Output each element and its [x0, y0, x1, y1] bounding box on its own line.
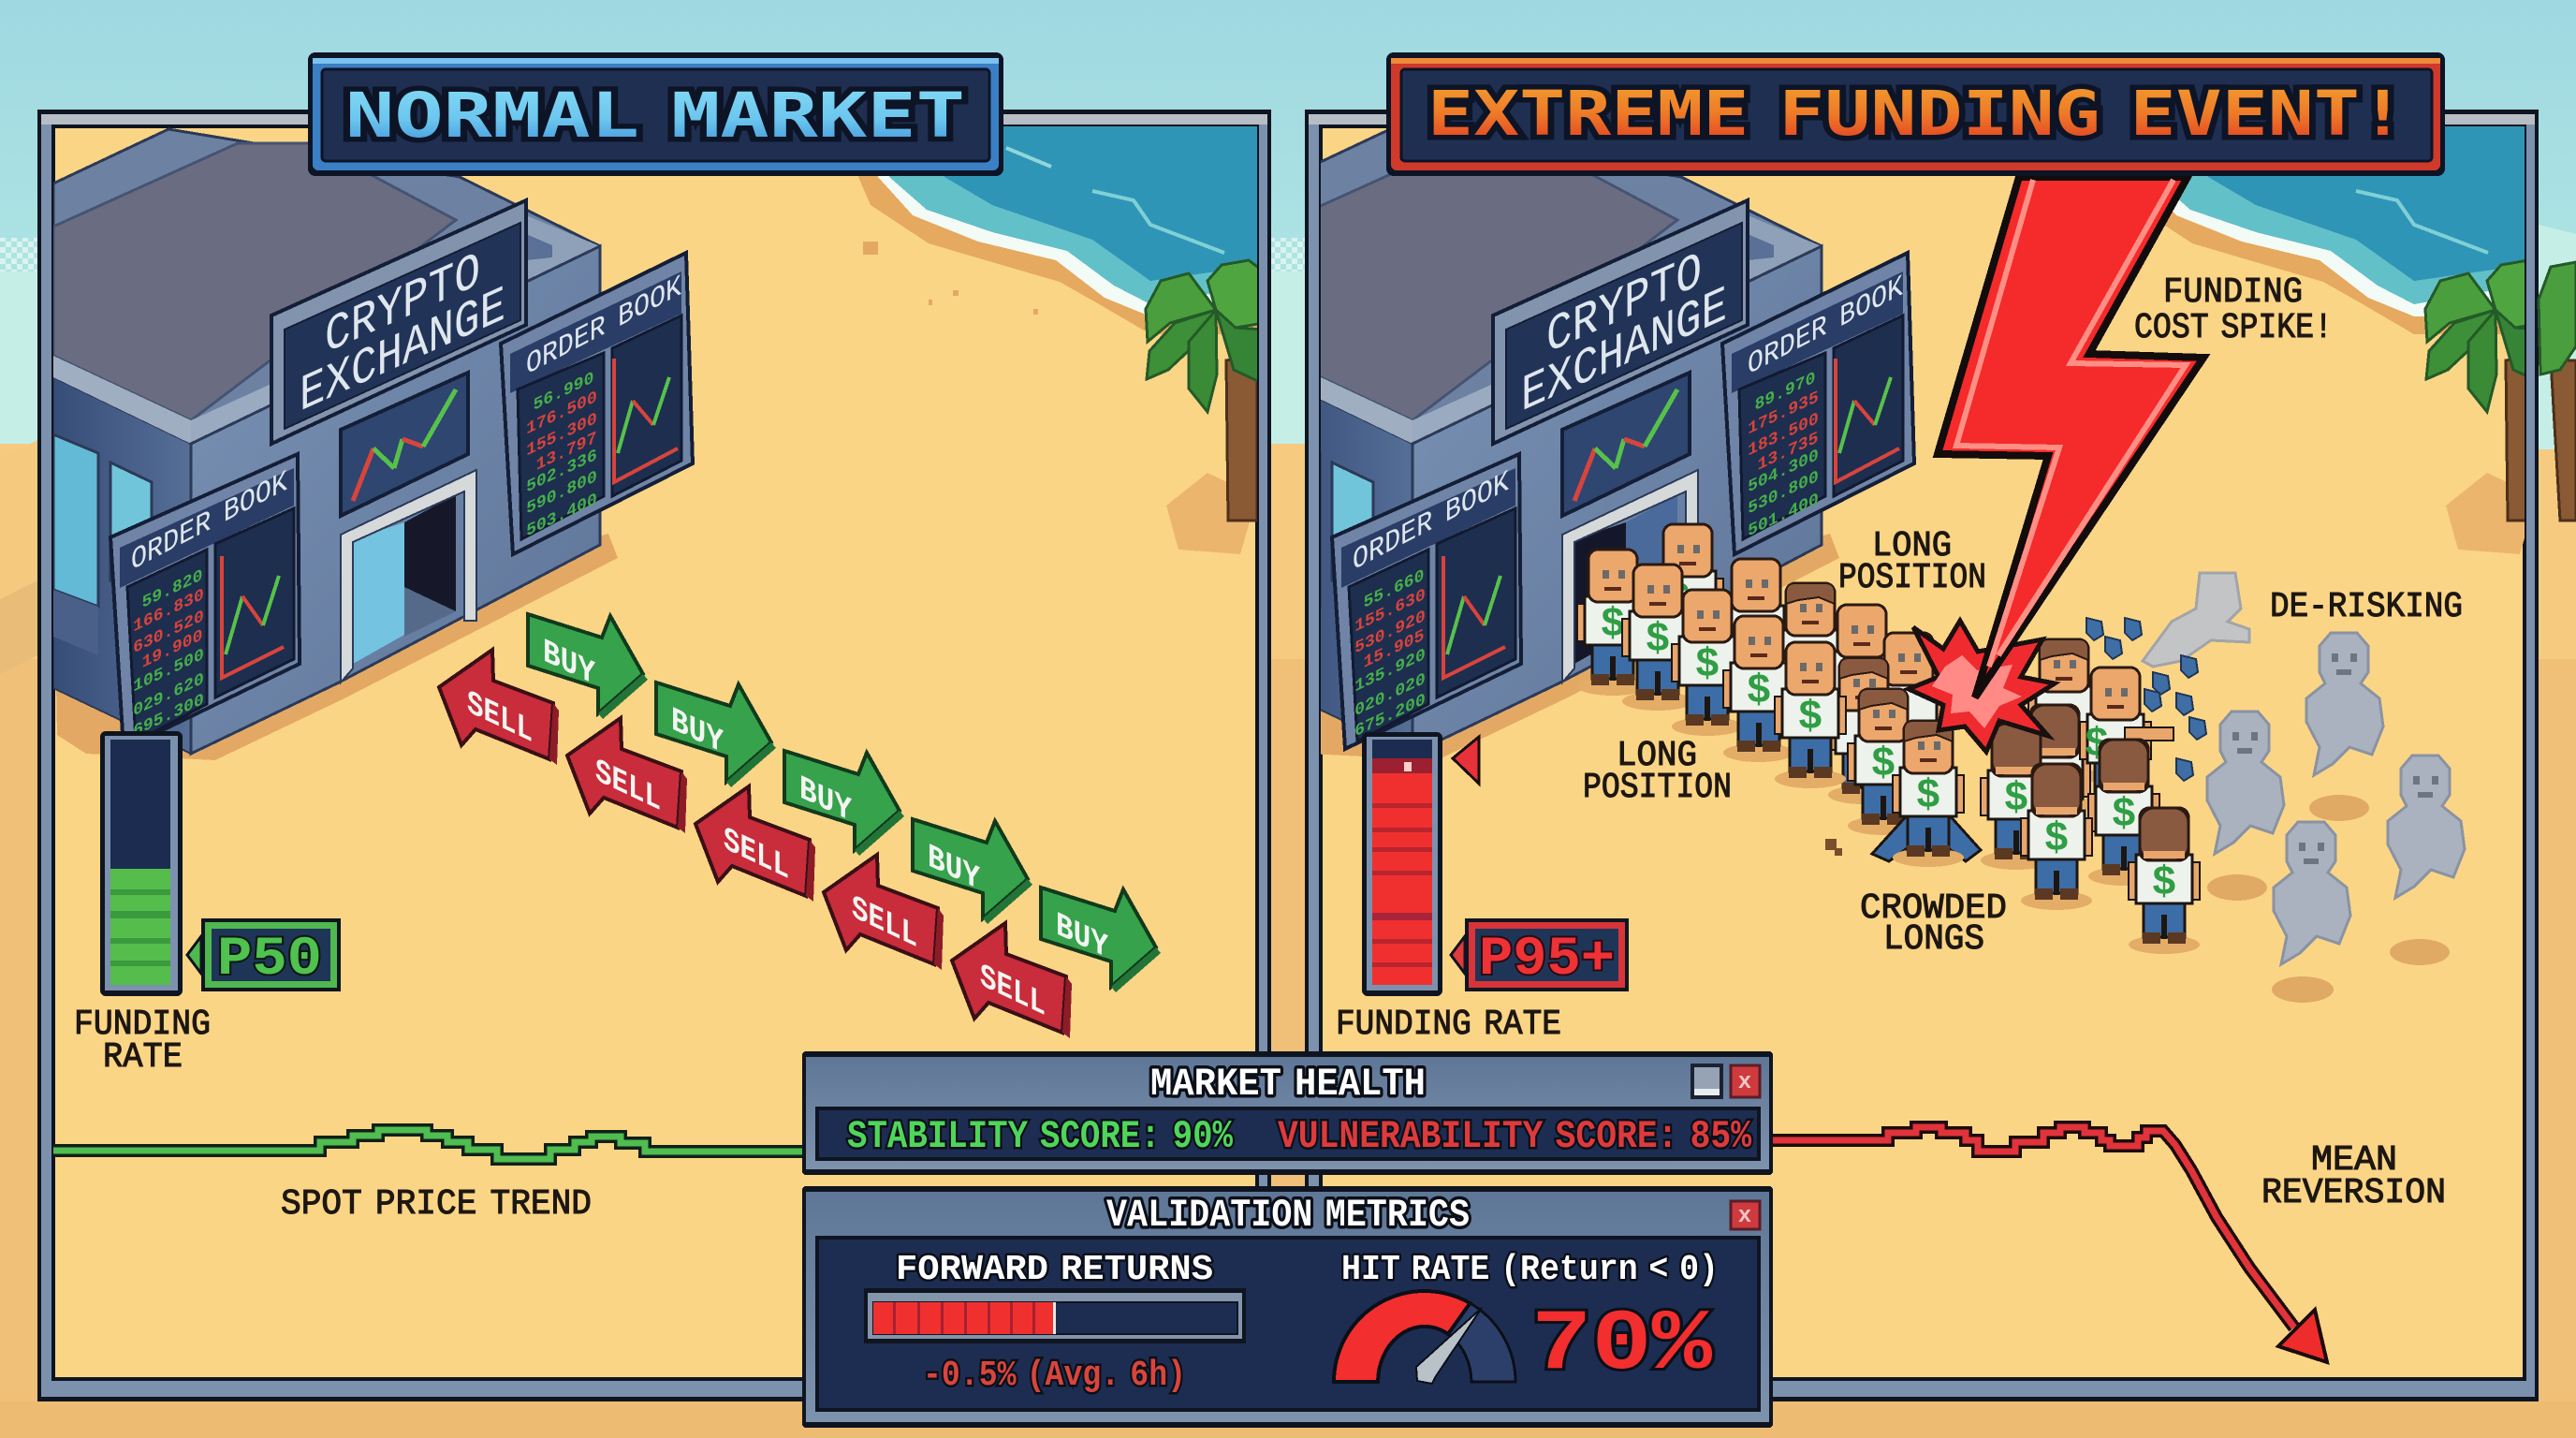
lightning bolt [1938, 177, 2203, 697]
sprawling figure with spread legs [1872, 721, 1981, 867]
crypto exchange building: 166.830 [133, 584, 204, 637]
crypto exchange building: 15.905 [1364, 625, 1424, 673]
crypto exchange building: 176.500 [526, 387, 597, 439]
hit rate heading: HIT RATE (Return < 0) [1341, 1250, 1719, 1290]
crowd of long positions: $ [1747, 668, 1771, 715]
label: long position top: LONG [1872, 526, 1952, 566]
label: crowded longs: CROWDED [1860, 888, 2007, 929]
tag: P95+ [1451, 918, 1629, 991]
close button [1731, 1201, 1760, 1229]
crypto exchange building: 630.520 [133, 606, 204, 658]
crypto exchange building: 89.970 [1755, 368, 1815, 416]
crypto exchange building: 155.630 [1354, 584, 1426, 637]
crypto exchange building: 504.300 [1748, 445, 1819, 497]
label: mean reversion: MEAN [2311, 1140, 2397, 1181]
crowd of long positions: $ [1695, 642, 1720, 689]
label: funding cost spike: FUNDING [2163, 272, 2303, 313]
crypto exchange building: EXCHANGE [300, 277, 505, 427]
title: extreme funding event: EXTREME FUNDING EVENT! [1427, 78, 2406, 150]
forward returns bar [864, 1288, 1246, 1343]
funding rate gauge P50 [100, 731, 183, 996]
close button [1731, 1065, 1760, 1097]
title: normal market [308, 52, 1003, 176]
crowd of long positions: $ [1666, 577, 1690, 624]
crowd of long positions [1577, 524, 2200, 954]
minimize button [1692, 1065, 1721, 1097]
crypto exchange building: 530.800 [1748, 466, 1819, 519]
tag: P50: P50 [217, 930, 322, 990]
buy and sell order arrows: BUY [671, 700, 724, 764]
label: spot price trend: SPOT PRICE TREND [281, 1184, 592, 1225]
funding rate gauge P95+ [1362, 732, 1442, 996]
crypto exchange building: 503.400 [526, 489, 597, 541]
flying debris [1825, 618, 2206, 856]
crypto exchange building: 175.935 [1748, 387, 1819, 439]
label: crowded longs: LONGS [1883, 919, 1984, 960]
crypto exchange building: 55.660 [1364, 565, 1424, 613]
label: funding rate: FUNDING RATE [1336, 1005, 1561, 1045]
label: mean reversion: REVERSION [2261, 1173, 2446, 1213]
label: long position lower: POSITION [1583, 768, 1732, 808]
palm tree [1146, 260, 1264, 554]
forward returns heading: FORWARD RETURNS [896, 1250, 1213, 1290]
crypto exchange building: 502.336 [526, 445, 597, 497]
crowd of long positions: $ [1601, 602, 1625, 649]
buy and sell order arrows: BUY [928, 837, 980, 901]
label: long position lower [1583, 736, 1732, 808]
hit rate value: 70% [1531, 1296, 1713, 1394]
label: crowded longs [1860, 888, 2007, 960]
crypto exchange building: ORDER BOOK [131, 465, 287, 580]
label: funding cost spike: COST SPIKE! [2134, 308, 2333, 348]
label: funding cost spike [2134, 272, 2333, 348]
crypto exchange building: 675.200 [1354, 689, 1426, 741]
crypto exchange building: 59.820 [142, 565, 202, 613]
buy and sell order arrows: BUY [1056, 905, 1108, 969]
buy and sell order arrows: BUY [799, 769, 852, 832]
marker arrow [1453, 737, 1479, 784]
window title: MARKET HEALTH [1150, 1062, 1426, 1107]
scene: left beach and building [53, 126, 1282, 1038]
scene: right beach and building [1275, 126, 2546, 1003]
tag: P95+: P95+ [1479, 930, 1615, 990]
crowd of long positions: $ [2004, 776, 2028, 823]
crowd of long positions: $ [2112, 792, 2136, 839]
spot price trend line [53, 1130, 805, 1159]
crypto exchange building: 13.735 [1758, 428, 1818, 476]
label: funding rate: RATE [103, 1037, 183, 1078]
crowd of long positions: $ [2085, 722, 2109, 769]
buy and sell order arrows: SELL [724, 820, 789, 889]
explosion core [1932, 655, 2022, 728]
panel frame right [1305, 110, 2539, 1401]
panel: normal market [37, 110, 1282, 1401]
crypto exchange building: 501.400 [1748, 489, 1819, 541]
crypto exchange building: 020.020 [1354, 668, 1426, 721]
crypto exchange building: 105.500 [133, 644, 204, 697]
crypto exchange building: 135.920 [1354, 644, 1426, 697]
vulnerability score: VULNERABILITY SCORE: 85% [1278, 1114, 1752, 1159]
crypto exchange building: ORDER BOOK [1748, 270, 1903, 384]
price trend with mean reversion arrow [1769, 1127, 2327, 1362]
close button: x [1738, 1204, 1751, 1229]
crypto exchange building: CRYPTO [1546, 242, 1702, 369]
hit rate gauge [1334, 1291, 1515, 1384]
crypto exchange building: CRYPTO [325, 242, 480, 369]
sand specks [863, 242, 1038, 315]
label: long position top [1838, 526, 1986, 598]
label: de-risking: DE-RISKING [2270, 587, 2463, 627]
buy and sell order arrows: SELL [595, 752, 661, 821]
panel frame left [37, 110, 1271, 1401]
buy and sell order arrows: SELL [980, 957, 1046, 1026]
crypto exchange building: 530.920 [1354, 606, 1426, 658]
panel: extreme funding event [1275, 110, 2576, 1401]
crypto exchange building: 183.500 [1748, 408, 1819, 461]
crowd of long positions: $ [2152, 860, 2176, 907]
crypto exchange building: 695.300 [133, 689, 204, 741]
crypto exchange building: 19.900 [142, 625, 202, 673]
window title: VALIDATION METRICS [1106, 1193, 1470, 1238]
label: long position lower: LONG [1617, 736, 1697, 776]
crypto exchange building: 029.620 [133, 668, 204, 721]
crypto exchange building: EXCHANGE [1521, 277, 1727, 427]
crypto exchange building: 590.800 [526, 466, 597, 519]
window: validation metrics [802, 1186, 1773, 1428]
crypto exchange building [53, 129, 693, 760]
crypto exchange building: 13.797 [536, 428, 596, 476]
crypto exchange building [1275, 129, 1914, 760]
crowd of long positions: $ [1871, 741, 1895, 788]
forward return value: -0.5% (Avg. 6h) [923, 1356, 1186, 1396]
label: funding rate: FUNDING [74, 1005, 211, 1045]
label: long position top: POSITION [1838, 558, 1986, 598]
explosion burst [1909, 621, 2055, 752]
crypto exchange building: ORDER BOOK [526, 270, 681, 384]
ocean [2165, 126, 2525, 334]
crowd of long positions: $ [1798, 695, 1822, 741]
ghost shadows [2207, 795, 2450, 1003]
buy and sell order arrows [439, 614, 1161, 1038]
crypto exchange building: 155.300 [526, 408, 597, 461]
buy and sell order arrows: SELL [852, 888, 917, 958]
buy and sell order arrows: BUY [543, 632, 595, 696]
title: normal market: NORMAL MARKET [345, 80, 965, 152]
ocean [858, 126, 1282, 334]
sprawling figure with spread legs: $ [1916, 773, 1940, 820]
label: mean reversion [2261, 1140, 2446, 1213]
crowd of long positions: $ [1646, 617, 1670, 664]
crypto exchange building: 56.990 [534, 368, 593, 416]
title: extreme funding event [1386, 52, 2445, 176]
background palm outside frame [2539, 262, 2576, 521]
palm tree [2424, 259, 2525, 554]
window: market health [802, 1051, 1773, 1175]
crowd of long positions: $ [2044, 816, 2069, 863]
de-risking ghosts [2143, 573, 2465, 964]
crypto exchange building: ORDER BOOK [1353, 465, 1509, 580]
buy and sell order arrows: SELL [467, 683, 533, 753]
close button: x [1738, 1070, 1751, 1095]
stability score: STABILITY SCORE: 90% [847, 1114, 1234, 1159]
tag: P50 [187, 918, 341, 991]
label: funding rate [74, 1005, 211, 1078]
